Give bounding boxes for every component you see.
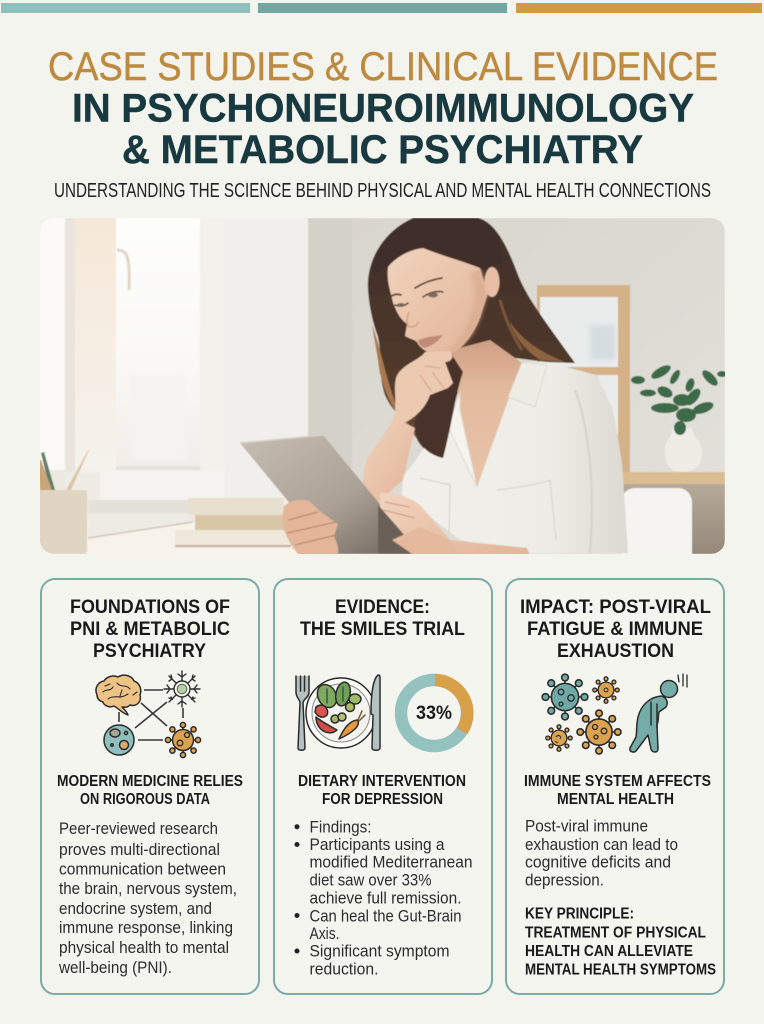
panel heading: PNI & METABOLIC	[70, 618, 230, 640]
panel heading: IMPACT: POST-VIRAL	[520, 596, 711, 618]
panel heading: FOUNDATIONS OF	[70, 596, 230, 618]
key principle callout	[525, 906, 716, 978]
bullet list: Can heal the Gut-Brain	[310, 906, 462, 925]
panel subheading: DIETARY INTERVENTION	[298, 773, 466, 790]
title: & METABOLIC PSYCHIATRY	[122, 128, 643, 172]
panel body text: endocrine system, and	[59, 899, 212, 918]
ear	[484, 267, 500, 297]
bullet list: modified Mediterranean	[310, 853, 472, 872]
panel subheading: ON RIGOROUS DATA	[80, 791, 210, 808]
panel: the SMILES trial	[274, 579, 492, 994]
back wall items	[537, 285, 630, 472]
panel body text	[58, 819, 237, 977]
title	[48, 45, 718, 172]
collar	[508, 362, 547, 407]
panel heading	[70, 596, 230, 662]
panel body text	[525, 817, 678, 890]
photo: woman reading a tablet at a desk	[36, 218, 727, 568]
key principle callout: MENTAL HEALTH SYMPTOMS	[525, 961, 716, 978]
bullet list: Axis.	[310, 924, 340, 943]
chart: 33% donut	[401, 680, 467, 746]
panel heading: PSYCHIATRY	[93, 640, 206, 662]
panel body text: depression.	[525, 871, 604, 890]
panel heading	[300, 596, 465, 640]
icon: exhausted person	[630, 674, 687, 752]
face	[388, 248, 488, 356]
shirt	[402, 362, 628, 553]
key principle callout: TREATMENT OF PHYSICAL	[525, 924, 706, 941]
icon: viruses	[542, 674, 621, 754]
bullet list: Participants using a	[310, 835, 445, 854]
right forearm	[380, 493, 530, 556]
panel heading: EXHAUSTION	[557, 640, 674, 662]
panel body text: Peer-reviewed research	[59, 819, 218, 838]
panel body text: physical health to mental	[59, 938, 229, 957]
forearm and chin hand	[360, 418, 415, 505]
icon: brain, neuron, cell and virus network	[96, 671, 201, 758]
panel heading	[520, 596, 711, 662]
bullet list	[294, 817, 472, 979]
panel body text: cognitive deficits and	[525, 853, 671, 872]
icon: plate of healthy food	[296, 675, 380, 750]
bullet list: Findings:	[310, 817, 372, 836]
panel subheading	[298, 773, 466, 808]
front hair	[387, 247, 484, 269]
panel subheading: FOR DEPRESSION	[322, 791, 443, 808]
hair back	[368, 218, 575, 458]
panel body text: communication between	[59, 860, 226, 878]
key principle callout: KEY PRINCIPLE:	[525, 906, 634, 923]
tablet	[240, 436, 380, 554]
title: IN PSYCHONEUROIMMUNOLOGY	[72, 86, 694, 130]
panel: foundations of PNI	[41, 579, 259, 994]
bullet list: reduction.	[310, 960, 378, 979]
panel body text: immune response, linking	[59, 918, 233, 937]
panel subheading	[524, 773, 711, 808]
desk items	[41, 452, 55, 490]
lower hair lock	[415, 355, 463, 458]
chart: 33% donut: 33%	[416, 703, 452, 724]
panel heading: EVIDENCE:	[335, 596, 430, 618]
panel body text: proves multi-directional	[59, 840, 220, 859]
neck and chest	[452, 340, 522, 487]
bullet list: Significant symptom	[310, 942, 450, 961]
panel: impact of post-viral fatigue	[506, 579, 724, 994]
panel subheading: MENTAL HEALTH	[557, 791, 674, 808]
panel body text: well-being (PNI).	[58, 958, 172, 977]
panel body text: the brain, nervous system,	[59, 879, 237, 898]
key principle callout: HEALTH CAN ALLEVIATE	[525, 943, 693, 960]
bullet list: achieve full remission.	[310, 888, 462, 907]
bullet list: diet saw over 33%	[310, 871, 432, 890]
left hand	[282, 500, 338, 556]
panel subheading	[57, 773, 243, 808]
top colour bars	[1, 3, 762, 13]
title: CASE STUDIES & CLINICAL EVIDENCE	[48, 45, 718, 89]
panel subheading: MODERN MEDICINE RELIES	[57, 773, 243, 790]
panel heading: THE SMILES TRIAL	[300, 618, 465, 640]
panel heading: FATIGUE & IMMUNE	[527, 618, 703, 640]
panel subheading: IMMUNE SYSTEM AFFECTS	[524, 773, 711, 790]
panel body text: exhaustion can lead to	[525, 835, 678, 854]
panel body text: Post-viral immune	[525, 817, 648, 836]
